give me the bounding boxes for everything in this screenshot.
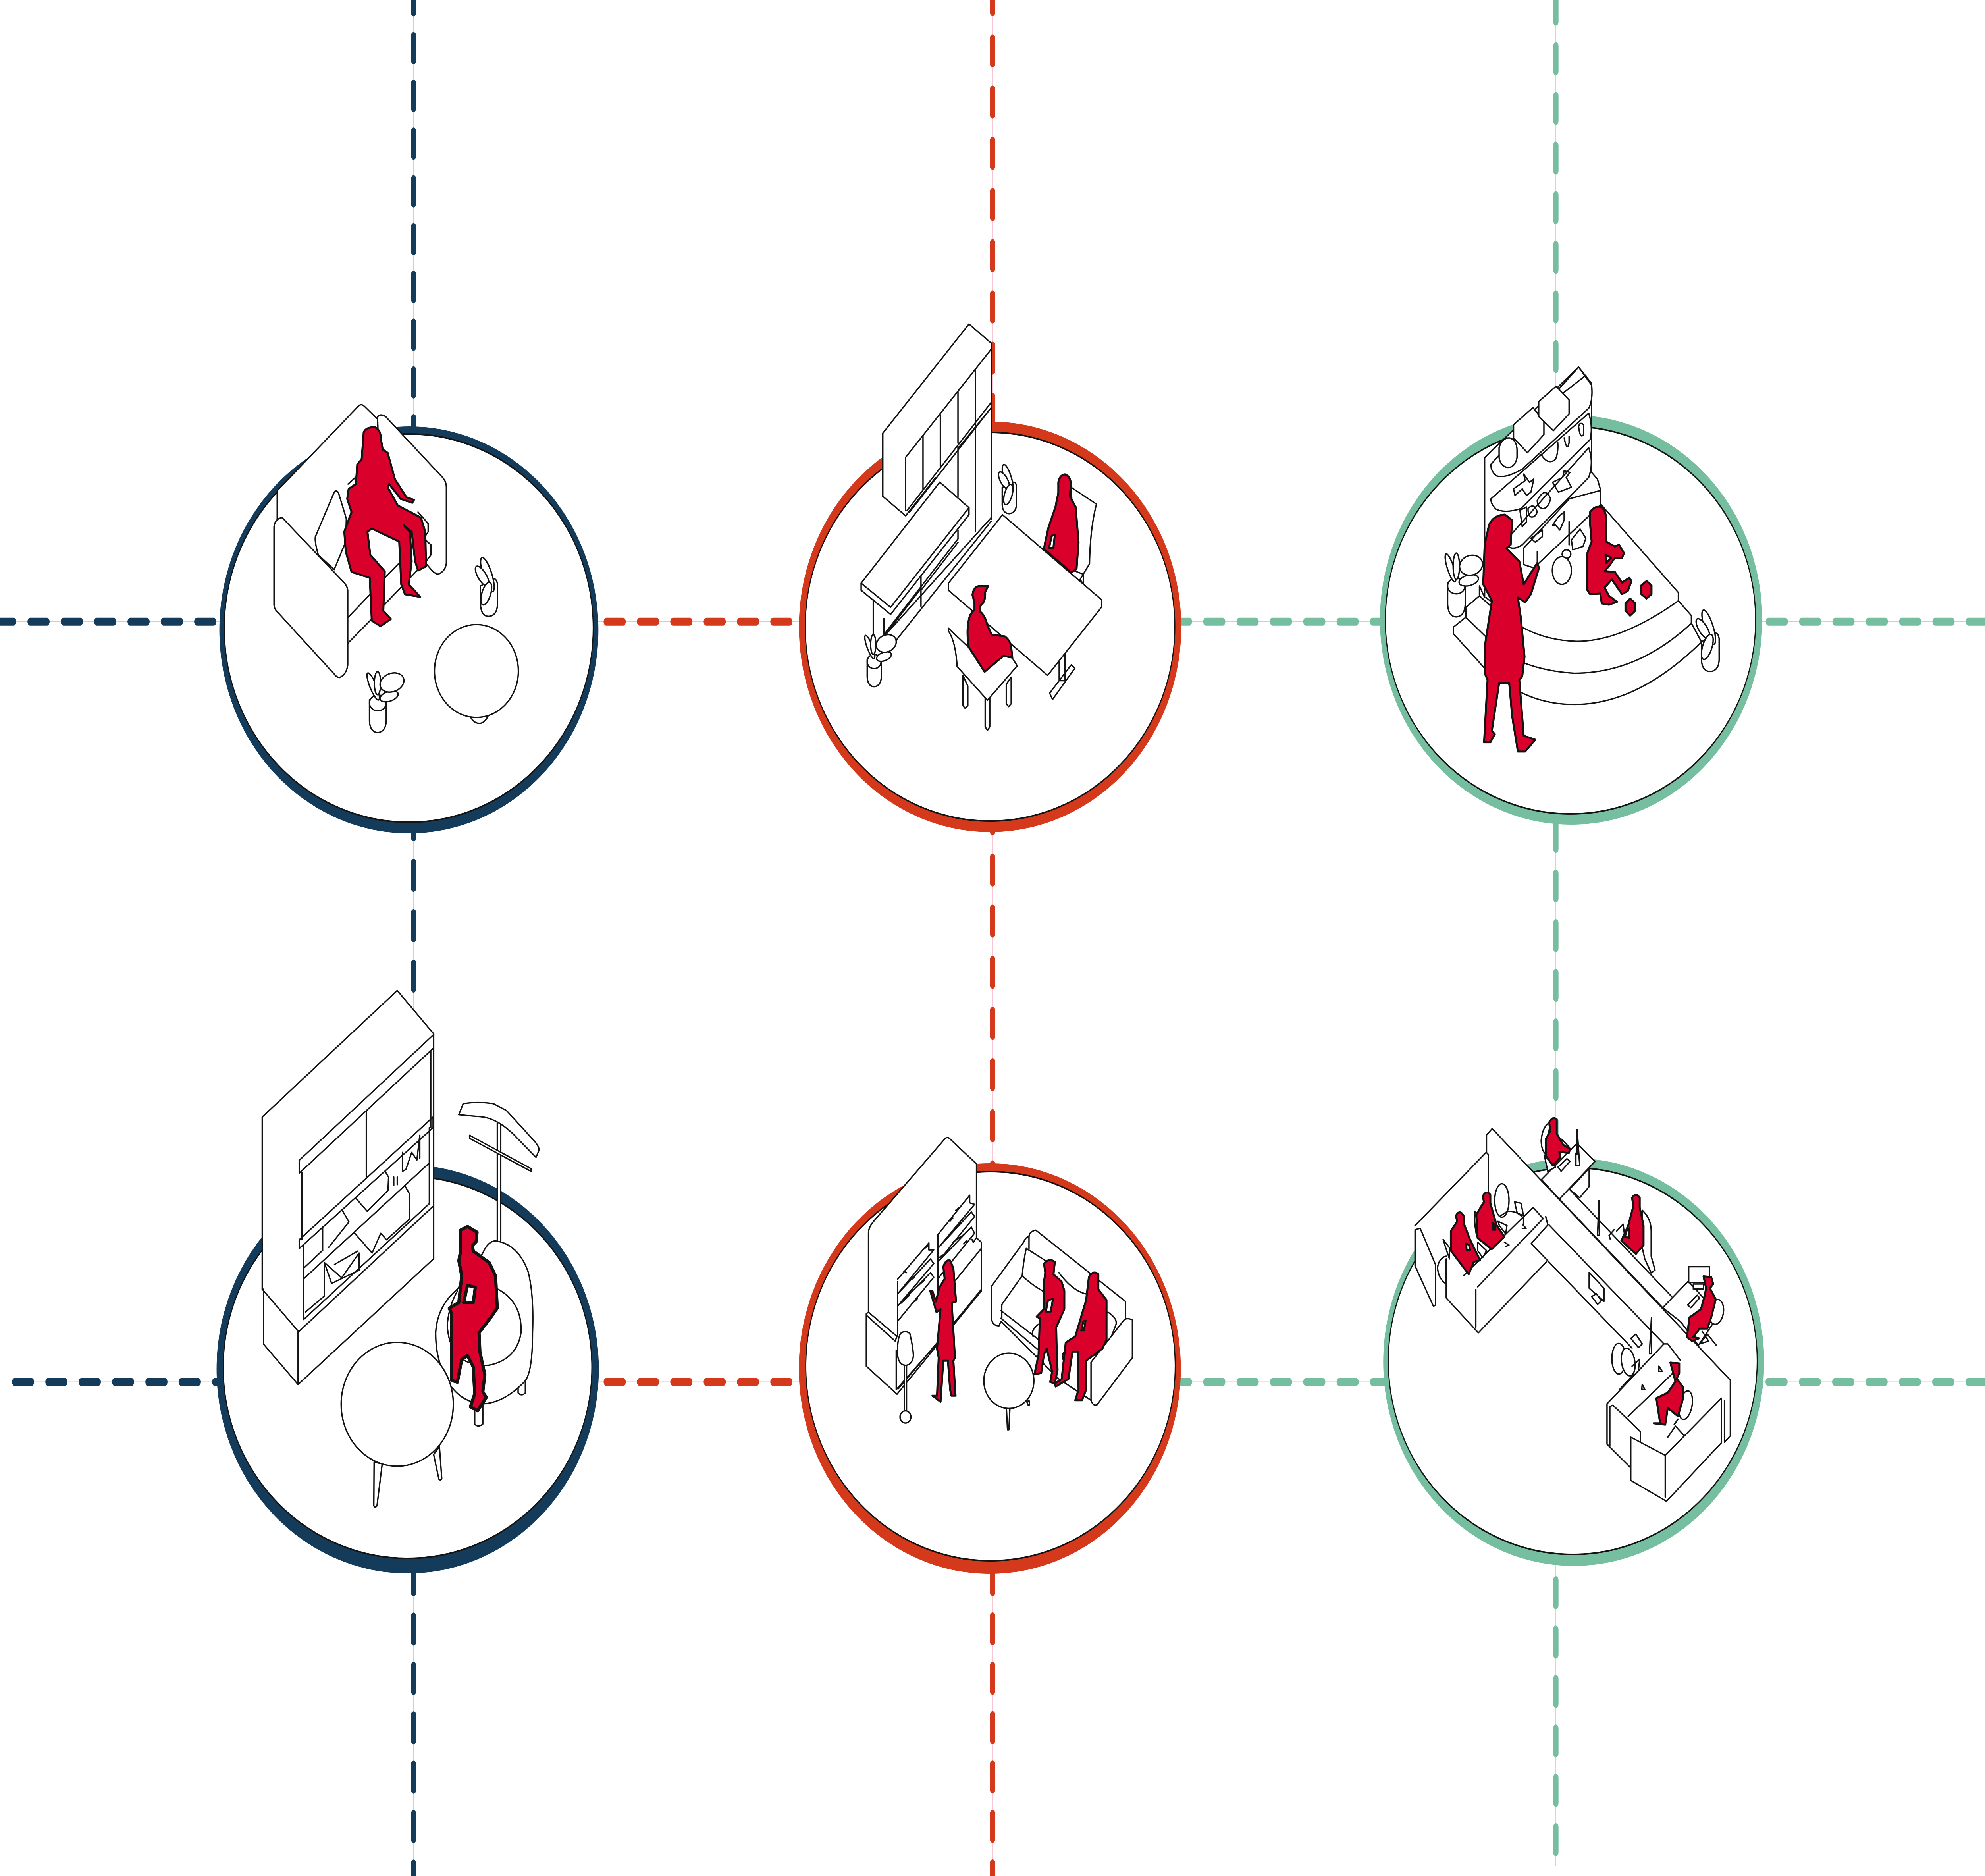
dashed line: navy row two bbox=[15, 1378, 231, 1386]
ring: orange bottom bbox=[799, 1163, 1181, 1574]
person seated bbox=[344, 427, 426, 626]
dashed line: green row two right bbox=[1768, 1378, 1985, 1386]
dashed line: orange row one bbox=[606, 618, 790, 626]
dashed line: navy column bottom bbox=[410, 1567, 418, 1876]
table leg bbox=[1050, 652, 1075, 700]
scene: bookcase reading nook bbox=[262, 991, 539, 1507]
scene: lounge sofa with seated person bbox=[274, 405, 518, 733]
seated person left bbox=[1035, 1260, 1064, 1384]
dashed line: orange row two bbox=[606, 1378, 790, 1386]
standing woman bbox=[930, 1260, 956, 1402]
plant right bbox=[473, 556, 497, 616]
plant lower bbox=[365, 670, 406, 733]
ring: green top bbox=[1380, 415, 1762, 825]
plant right bbox=[1694, 608, 1719, 671]
two seated people left block bbox=[1451, 1192, 1504, 1274]
coat stand bbox=[459, 1103, 539, 1244]
near chair bbox=[948, 628, 1017, 730]
dashed line: green column top bbox=[1552, 0, 1560, 421]
ring: navy top bbox=[220, 426, 598, 833]
plant right bbox=[996, 463, 1016, 514]
scene: play corner with shelves, adult and child bbox=[1443, 367, 1719, 752]
person near side bbox=[967, 586, 1012, 672]
child playing bbox=[1587, 507, 1632, 605]
lower right block bbox=[1607, 1344, 1721, 1501]
left block chairs bbox=[1443, 1184, 1526, 1259]
dashed line: orange column middle bbox=[989, 806, 996, 1167]
top desk bbox=[1542, 1130, 1595, 1199]
long partition bbox=[1415, 1129, 1730, 1501]
person and chair at centre desk bbox=[1598, 1195, 1655, 1273]
stepped platform bbox=[1453, 367, 1702, 704]
dashed line: orange column bottom bbox=[989, 1567, 996, 1876]
right desk with monitor bbox=[1663, 1267, 1725, 1345]
adult standing bbox=[1483, 515, 1539, 752]
dashed line: green row two left bbox=[1173, 1378, 1390, 1386]
ring: orange top bbox=[799, 422, 1181, 832]
ring: navy bottom bbox=[217, 1165, 599, 1573]
floor lamp bbox=[898, 1332, 913, 1423]
far chair bbox=[1072, 488, 1097, 584]
ring: green bottom bbox=[1383, 1158, 1764, 1566]
person with book bbox=[449, 1226, 497, 1411]
scene: desk meeting with wall cabinet bbox=[861, 324, 1102, 730]
dashed line: green column bottom bbox=[1552, 1580, 1560, 1852]
sofa bbox=[991, 1230, 1132, 1405]
shelves with toys bbox=[1491, 367, 1600, 584]
round table bbox=[341, 1342, 453, 1507]
seated person right bbox=[1055, 1273, 1106, 1400]
wall cabinet and counter bbox=[861, 324, 991, 640]
dashed line: orange column top bbox=[989, 0, 996, 425]
armchair bbox=[436, 1241, 533, 1426]
table bbox=[948, 515, 1102, 675]
person top desk bbox=[1541, 1118, 1570, 1171]
dashed line: navy column middle bbox=[410, 812, 418, 1171]
dashed line: green row one right bbox=[1768, 618, 1985, 626]
plant left bbox=[863, 632, 898, 687]
sofa bbox=[274, 405, 446, 678]
dashed line: navy column top bbox=[410, 0, 418, 433]
toy blocks bbox=[1625, 581, 1652, 616]
dashed line: green row one left bbox=[1173, 618, 1390, 626]
person far side bbox=[1044, 474, 1079, 573]
scene: library lounge bbox=[866, 1138, 1132, 1430]
dashed line: navy row one bbox=[0, 618, 214, 626]
round table bbox=[984, 1353, 1034, 1430]
plant left bbox=[1443, 553, 1484, 617]
dashed line: green column middle bbox=[1552, 824, 1560, 1163]
lower chairs and monitor bbox=[1612, 1317, 1652, 1390]
scene: open office workstations bbox=[1415, 1118, 1730, 1501]
centre monitor bbox=[1589, 1273, 1604, 1304]
round table bbox=[434, 625, 518, 723]
bookcase bbox=[262, 991, 434, 1384]
display wall bbox=[866, 1138, 981, 1394]
